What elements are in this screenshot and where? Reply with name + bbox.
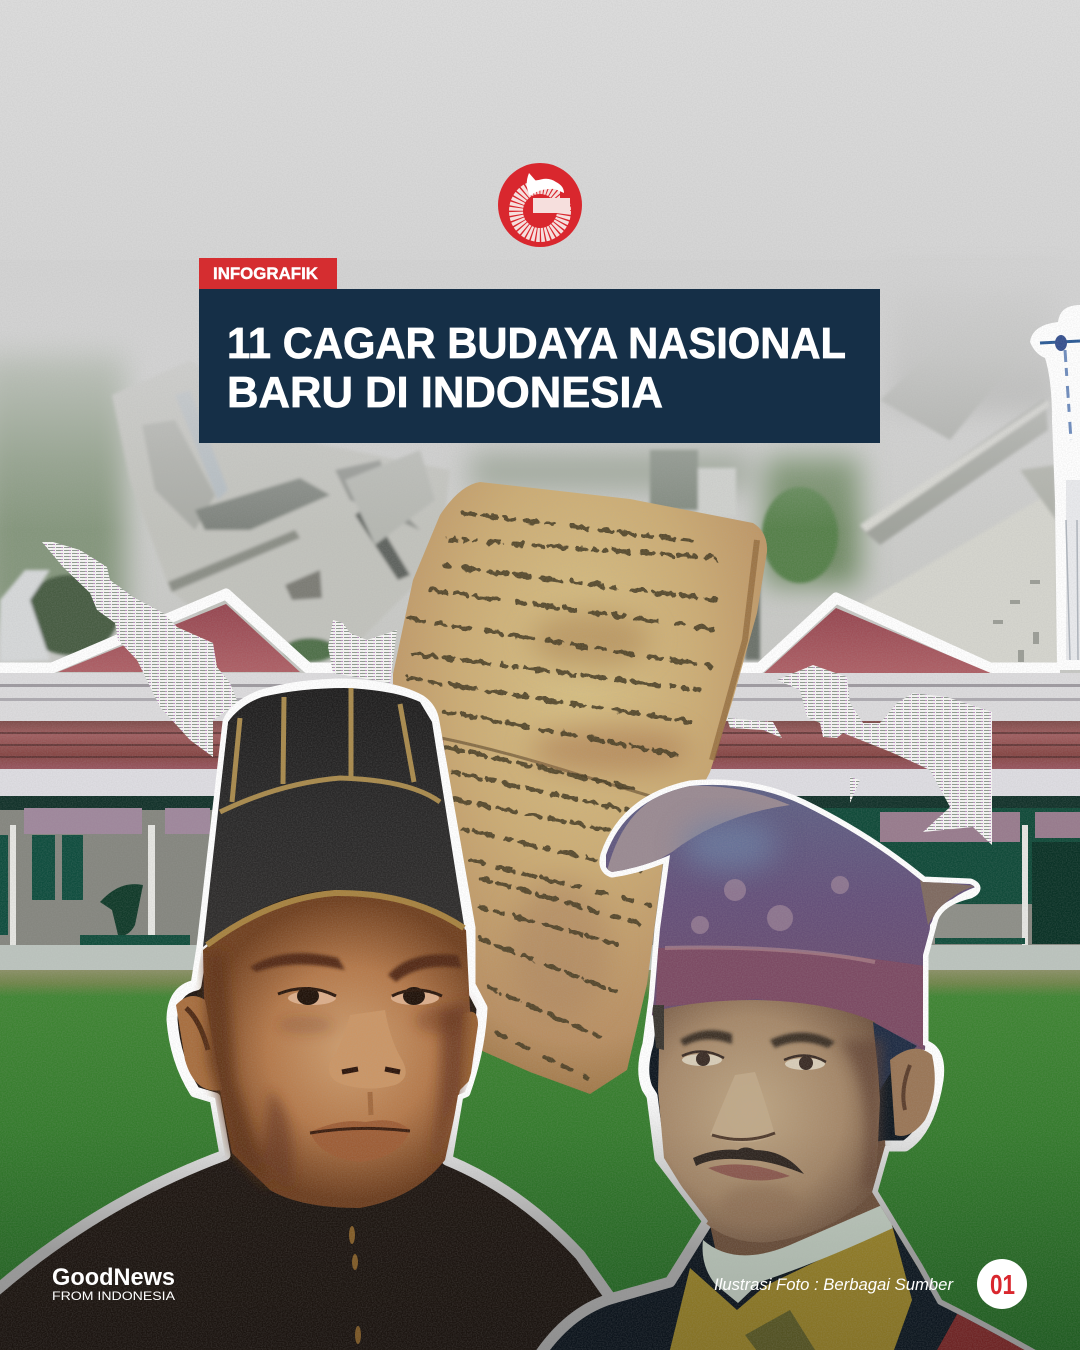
- background: misty sky: [0, 0, 1080, 700]
- white fascia: [0, 769, 1080, 796]
- coat centre: [745, 1310, 815, 1350]
- page number badge: 01: [990, 1269, 1015, 1300]
- roof peak right: [763, 608, 993, 674]
- building: Indonesian heritage hall: [0, 594, 1080, 975]
- white roofline outline: [0, 594, 1060, 668]
- right wing grey wall: [930, 905, 1022, 943]
- columns: [10, 825, 1028, 950]
- logo: red garuda badge: [498, 163, 582, 247]
- title text: BARU DI INDONESIA: [227, 368, 663, 417]
- headcloth: [606, 780, 985, 1050]
- shaded verandah: [0, 796, 1080, 810]
- chin shade: [720, 1185, 800, 1225]
- headcloth flap: [606, 786, 790, 875]
- tile rows: [0, 732, 1080, 758]
- tag: INFOGRAFIK: INFOGRAFIK: [213, 264, 319, 283]
- white collar: [702, 1205, 893, 1303]
- parchment: [393, 482, 767, 1094]
- left ear shadow: [186, 1008, 208, 1050]
- hair right: [873, 1022, 917, 1090]
- tag: INFOGRAFIK: [199, 258, 337, 289]
- eyebrows: [250, 953, 462, 982]
- red disc: [498, 163, 582, 247]
- portrait: right figure: [530, 780, 1065, 1350]
- moustache: [693, 1148, 804, 1174]
- brand: GoodNews from Indonesia: FROM INDONESIA: [52, 1289, 175, 1303]
- right wing teal wall: [760, 808, 1080, 904]
- neck: [710, 1140, 890, 1256]
- headcloth flower pattern: [691, 876, 849, 934]
- fold line: [441, 738, 680, 805]
- dark right wing: [1032, 842, 1080, 944]
- pupils: [297, 987, 425, 1005]
- gold horizontal band: [220, 778, 440, 812]
- map of Indonesia speckled overlay: [42, 542, 992, 845]
- eyelids: [682, 1051, 826, 1062]
- worn edge: [712, 540, 757, 760]
- pavement: [0, 945, 1080, 975]
- title panel: [199, 289, 880, 443]
- eyebrows: [680, 1030, 835, 1048]
- Sulawesi and Papua: [777, 665, 992, 845]
- nostril shade: [712, 1133, 775, 1140]
- curtains right: [880, 812, 1080, 842]
- right ear: [460, 1012, 478, 1090]
- cap edge: [207, 893, 464, 945]
- Sumatra: [42, 542, 238, 757]
- eyes: [696, 1052, 813, 1070]
- right-cheek shade: [840, 1040, 882, 1190]
- mouth line: [310, 1128, 410, 1133]
- nose: [346, 1010, 406, 1088]
- skin shadows: [205, 950, 468, 1190]
- manuscript page: [393, 482, 767, 1094]
- title text: [227, 319, 846, 417]
- Nusa Tenggara islet: [850, 777, 860, 803]
- title text: 11 CAGAR BUDAYA NASIONAL: [227, 319, 846, 368]
- face: [203, 893, 470, 1208]
- white sticker outline: [530, 785, 1060, 1350]
- ring gap: [560, 186, 574, 198]
- monument tower: [1030, 305, 1080, 670]
- G counter: [528, 213, 552, 217]
- fog overlay: [0, 260, 1080, 530]
- bird head: [527, 173, 564, 196]
- teal skirting: [80, 935, 1025, 945]
- white sticker outline: [0, 684, 640, 1350]
- page number badge: [977, 1259, 1027, 1309]
- nose: [710, 1072, 775, 1142]
- red tile roof: [0, 721, 1080, 769]
- eye whites: [288, 991, 439, 1005]
- letter G bar: [533, 198, 570, 213]
- right headcloth tip: [920, 880, 975, 925]
- brand: GoodNews from Indonesia: [52, 1264, 175, 1303]
- ear: [890, 1049, 935, 1136]
- white ring motif: [516, 187, 564, 235]
- rooftop vents: [993, 580, 1040, 662]
- bottom vignette: [0, 1130, 1080, 1350]
- photo credit: Ilustrasi Foto : Berbagai Sumber: [714, 1275, 954, 1294]
- band highlight: [665, 948, 875, 962]
- headcloth band: [656, 948, 925, 1050]
- lips: [311, 1120, 409, 1154]
- philtrum: [370, 1092, 371, 1115]
- eave lines: [0, 684, 1080, 701]
- red sash: [937, 1300, 1040, 1350]
- handwritten script lines: [407, 513, 717, 1078]
- eyelid lines: [278, 988, 442, 996]
- eye whites: [682, 1054, 825, 1070]
- lips: [708, 1164, 790, 1180]
- age stains: [510, 610, 690, 1020]
- roof peak left: [58, 604, 300, 672]
- left ear: [176, 996, 222, 1091]
- black cap: [203, 688, 464, 947]
- yellow coat: [665, 1225, 925, 1350]
- cloth buttons: [349, 1226, 361, 1344]
- brand: GoodNews from Indonesia: GoodNews: [52, 1264, 175, 1291]
- ear inner: [903, 1065, 910, 1110]
- ground floor wall: [0, 796, 1080, 946]
- curtains left: [24, 808, 210, 834]
- face: [658, 1000, 880, 1242]
- Kalimantan: [328, 620, 397, 683]
- portrait: left figure: [0, 684, 640, 1350]
- gold vertical stripes: [232, 688, 414, 802]
- hair left: [652, 1005, 664, 1050]
- upper white eave: [0, 673, 1080, 723]
- shrub: [100, 884, 143, 936]
- dark jacket right: [885, 1225, 1065, 1350]
- Maluku islet: [727, 718, 782, 738]
- grass lawn: [0, 970, 1080, 1350]
- nostrils: [342, 1069, 400, 1072]
- doors: [0, 835, 83, 935]
- aerial photo of town: [0, 280, 1060, 665]
- blue highlight: [682, 819, 778, 871]
